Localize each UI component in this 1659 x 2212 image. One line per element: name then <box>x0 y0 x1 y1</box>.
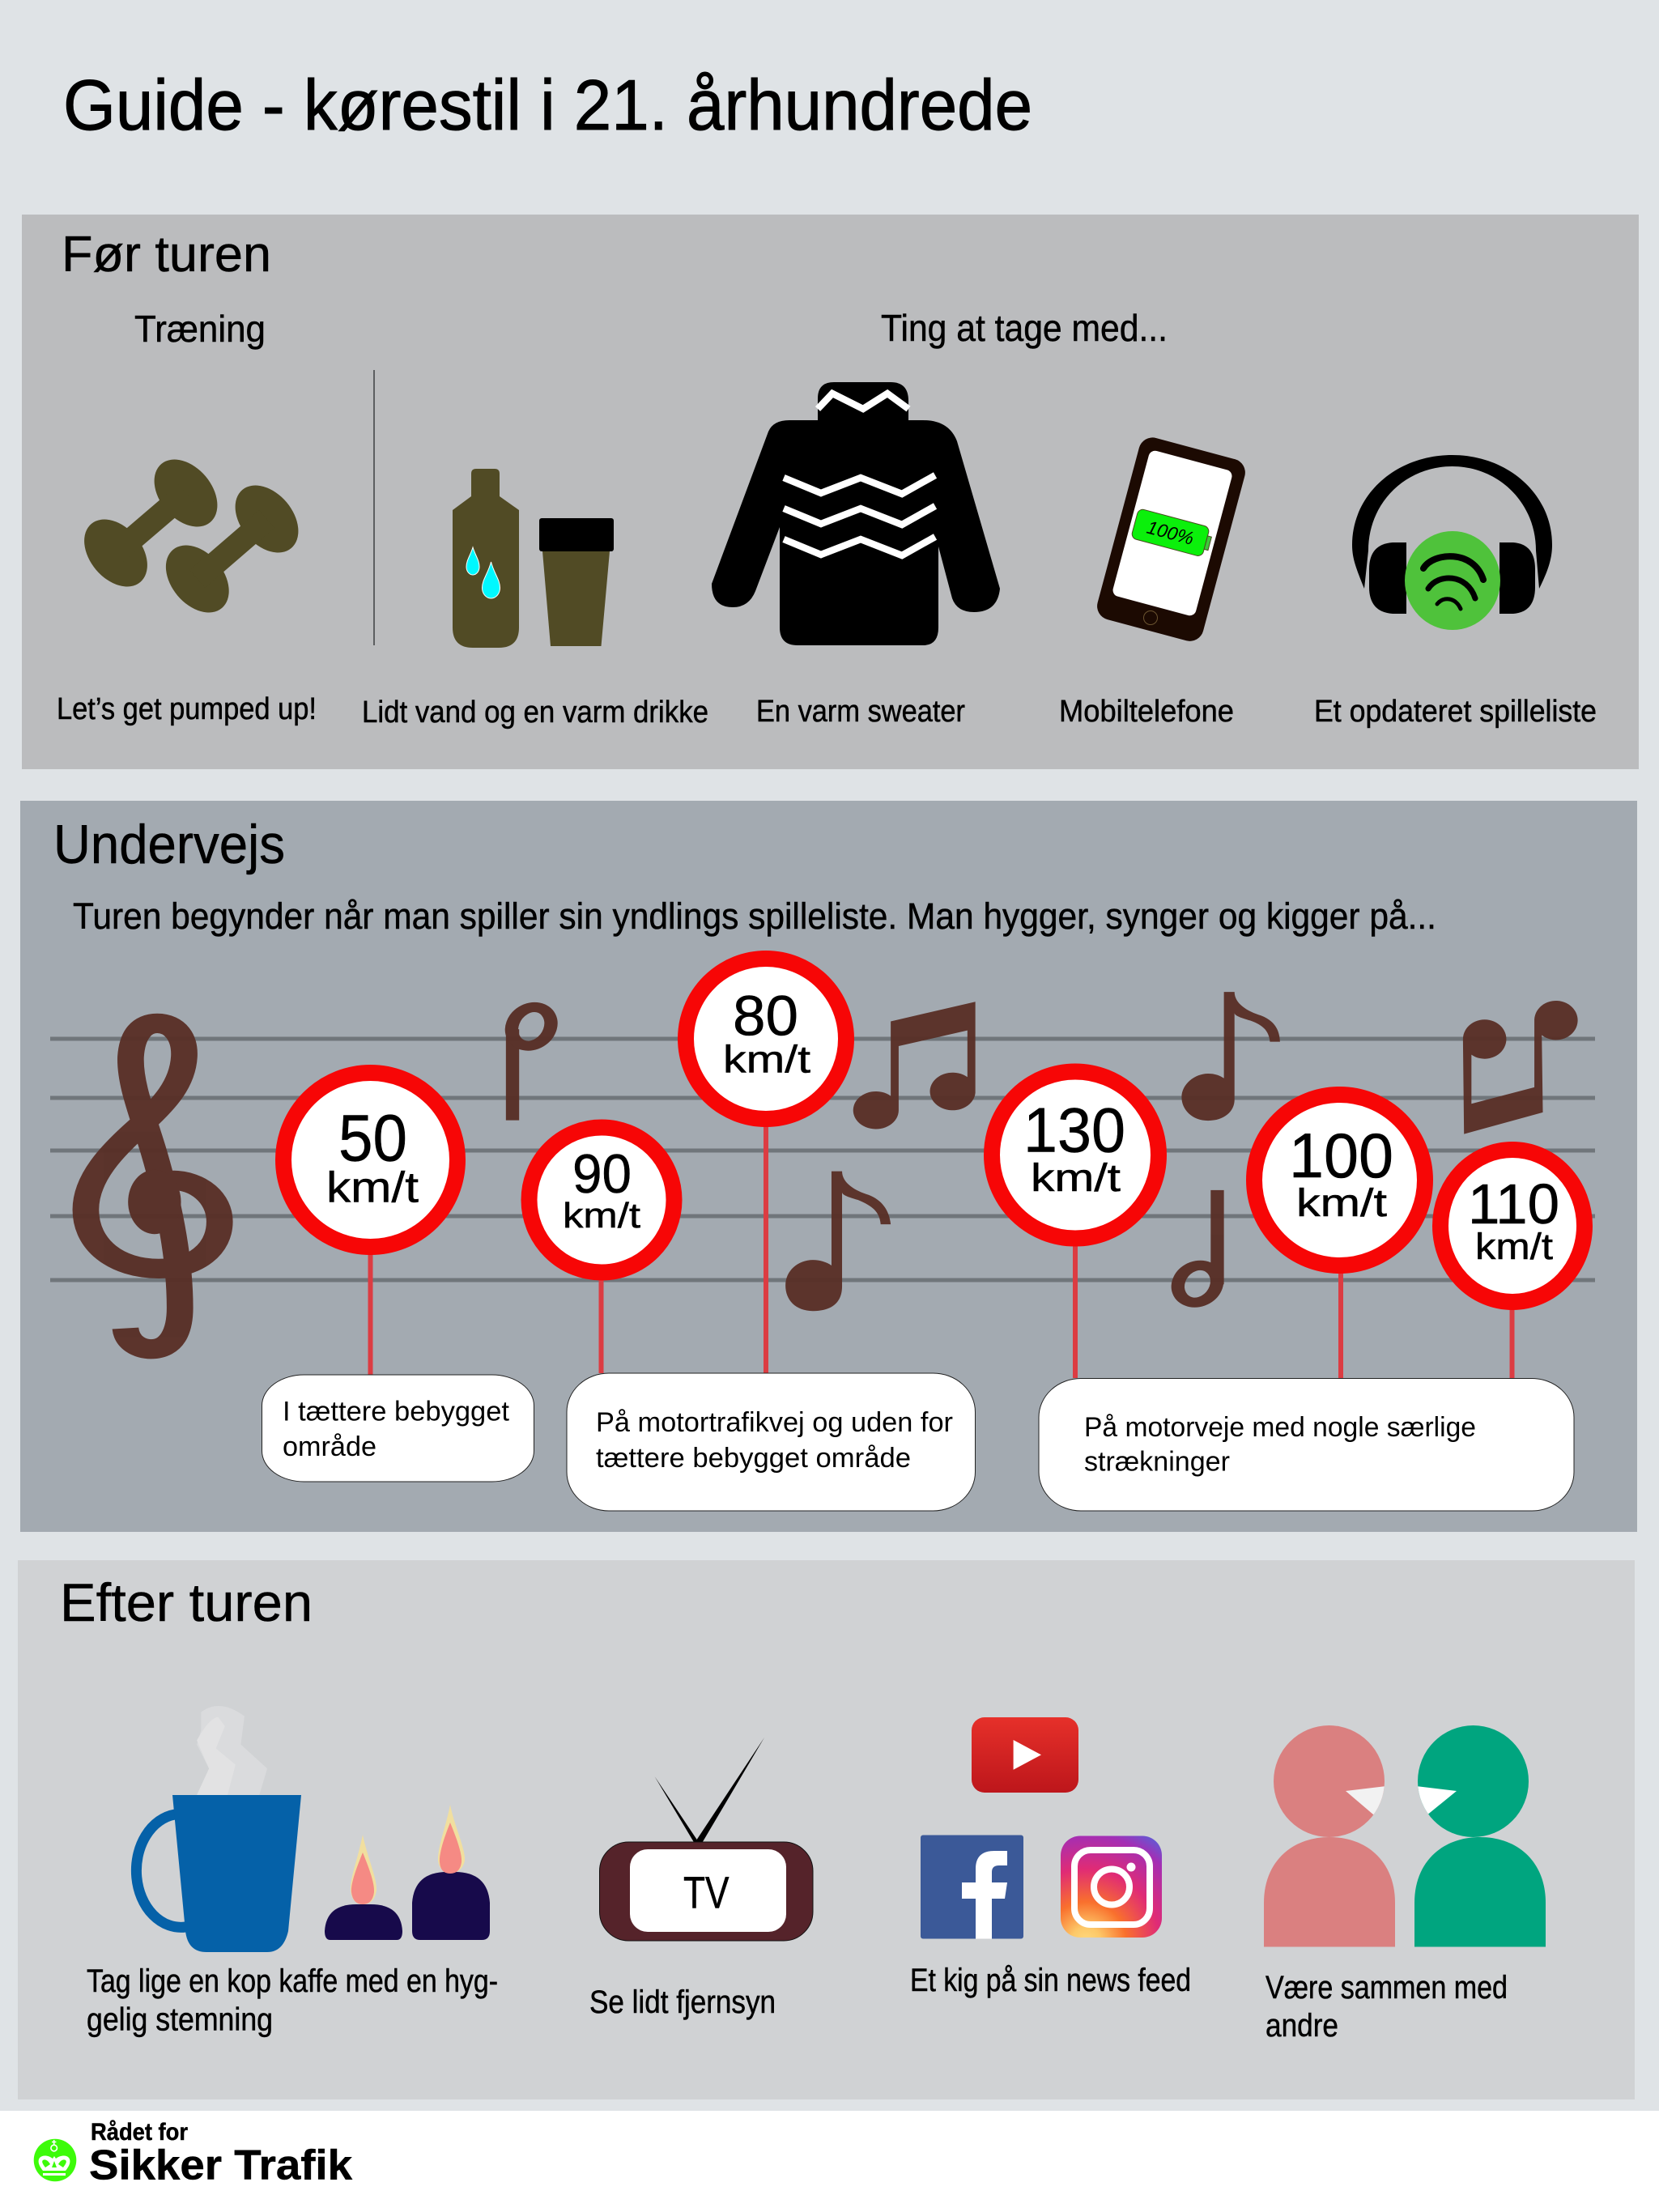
battery <box>1131 508 1214 558</box>
icon: tall candle <box>412 1805 490 1940</box>
label: news feed: Et kig på sin news feed <box>910 1963 1191 1998</box>
heading: undervejs: Undervejs <box>53 814 285 875</box>
sign: 90 km/t: 90 <box>572 1143 632 1205</box>
sign: 100 km/t: km/t <box>1296 1182 1387 1225</box>
label: pumped up: Let’s get pumped up! <box>57 692 317 726</box>
sign: 80 km/t <box>686 959 846 1373</box>
icon: water bottle <box>453 469 519 648</box>
heading: efter turen: Efter turen <box>60 1572 313 1632</box>
sign: 110 km/t: km/t <box>1475 1226 1554 1267</box>
sign: 110 km/t <box>1440 1150 1585 1379</box>
label: fjernsyn: Se lidt fjernsyn <box>589 1984 776 2020</box>
label: vand og drikke: Lidt vand og en varm drikke <box>362 696 708 730</box>
logo: crown badge <box>34 2139 76 2181</box>
callout: tættere bebygget område: område <box>283 1431 376 1462</box>
sign: 80 km/t: km/t <box>723 1038 810 1080</box>
icon: person green <box>1410 1725 1546 1946</box>
callout: motorveje: strækninger <box>1084 1446 1230 1477</box>
icon: dumbbells <box>71 447 311 625</box>
icon: beamed notes <box>853 1002 976 1129</box>
logo: small line: Rådet for <box>91 2119 188 2146</box>
sign: 130 km/t: 130 <box>1023 1095 1125 1166</box>
callout: tættere bebygget område: I tættere bebygget <box>283 1396 510 1427</box>
sign: 50 km/t <box>283 1073 457 1375</box>
subheading: træning: Træning <box>134 308 266 350</box>
label: kaffe: gelig stemning <box>87 2001 273 2037</box>
icon: water drop small <box>466 547 479 575</box>
callout: motorveje <box>1039 1378 1574 1511</box>
sign: 90 km/t: km/t <box>563 1196 640 1236</box>
icon: youtube <box>972 1717 1078 1793</box>
callout: tættere bebygget område <box>262 1375 534 1482</box>
icon: eighth note high <box>1181 992 1280 1121</box>
sign: 130 km/t <box>992 1072 1159 1378</box>
icon: instagram <box>1061 1836 1162 1938</box>
label: være sammen <box>1266 1970 1508 2044</box>
subheading: ting at tage med: Ting at tage med... <box>881 307 1168 349</box>
callout: motortrafikvej: På motortrafikvej og uden for <box>596 1407 953 1438</box>
icon: headphones with music logo <box>1352 455 1552 630</box>
callout: motortrafikvej <box>567 1373 975 1511</box>
icon: small candle <box>325 1835 402 1940</box>
battery: 100% <box>1145 517 1196 549</box>
sign: 100 km/t: 100 <box>1289 1120 1393 1191</box>
icon: half note <box>506 1004 556 1121</box>
label: spilleliste: Et opdateret spilleliste <box>1314 695 1597 729</box>
icon: facebook <box>921 1835 1023 1938</box>
icon: half note low <box>1172 1190 1224 1306</box>
icon: inverted beamed notes <box>1463 1001 1578 1134</box>
icon: mobile phone <box>1094 435 1249 644</box>
label: kaffe <box>87 1963 498 2037</box>
callout: motorveje: På motorveje med nogle særlige <box>1084 1412 1476 1443</box>
steam <box>197 1706 267 1795</box>
staff lines <box>50 1036 1595 1283</box>
logo: large line: Sikker Trafik <box>89 2142 352 2189</box>
panel: undervejs <box>20 801 1637 1532</box>
callout: motortrafikvej: tættere bebygget område <box>596 1443 911 1474</box>
sign: 100 km/t <box>1254 1095 1425 1379</box>
label: mobiltelefone: Mobiltelefone <box>1059 695 1234 729</box>
title: Guide - kørestil i 21. århundrede <box>63 65 1032 145</box>
sign: 130 km/t: km/t <box>1031 1157 1121 1200</box>
panel: før turen <box>22 215 1639 769</box>
sign: 80 km/t: 80 <box>733 985 798 1048</box>
icon: sweater <box>712 382 1000 645</box>
icon: eighth note low <box>785 1172 891 1311</box>
sign: 50 km/t: 50 <box>338 1101 407 1176</box>
label: sweater: En varm sweater <box>756 695 965 729</box>
footer <box>0 2111 1659 2212</box>
label: kaffe: Tag lige en kop kaffe med en hyg- <box>87 1963 498 1999</box>
sign: 50 km/t: km/t <box>326 1164 419 1211</box>
heading: før turen: Før turen <box>62 227 271 283</box>
icon: TV: TV <box>683 1867 730 1917</box>
intro text: Turen begynder når man spiller sin yndlings spilleliste. Man hygger, synger og kigger på... <box>73 895 1436 937</box>
panel: efter turen <box>18 1560 1635 2099</box>
icon: water drop large <box>483 562 500 598</box>
icon: person pink <box>1264 1725 1395 1946</box>
sign: 110 km/t: 110 <box>1468 1172 1559 1236</box>
icon: treble clef <box>86 1023 219 1349</box>
icon: coffee mug with steam <box>136 1706 301 1952</box>
icon: travel cup <box>539 518 614 646</box>
label: være sammen: andre <box>1266 2008 1338 2044</box>
label: være sammen: Være sammen med <box>1266 1970 1508 2006</box>
sign: 90 km/t <box>530 1127 674 1373</box>
icon: TV <box>599 1738 813 1941</box>
